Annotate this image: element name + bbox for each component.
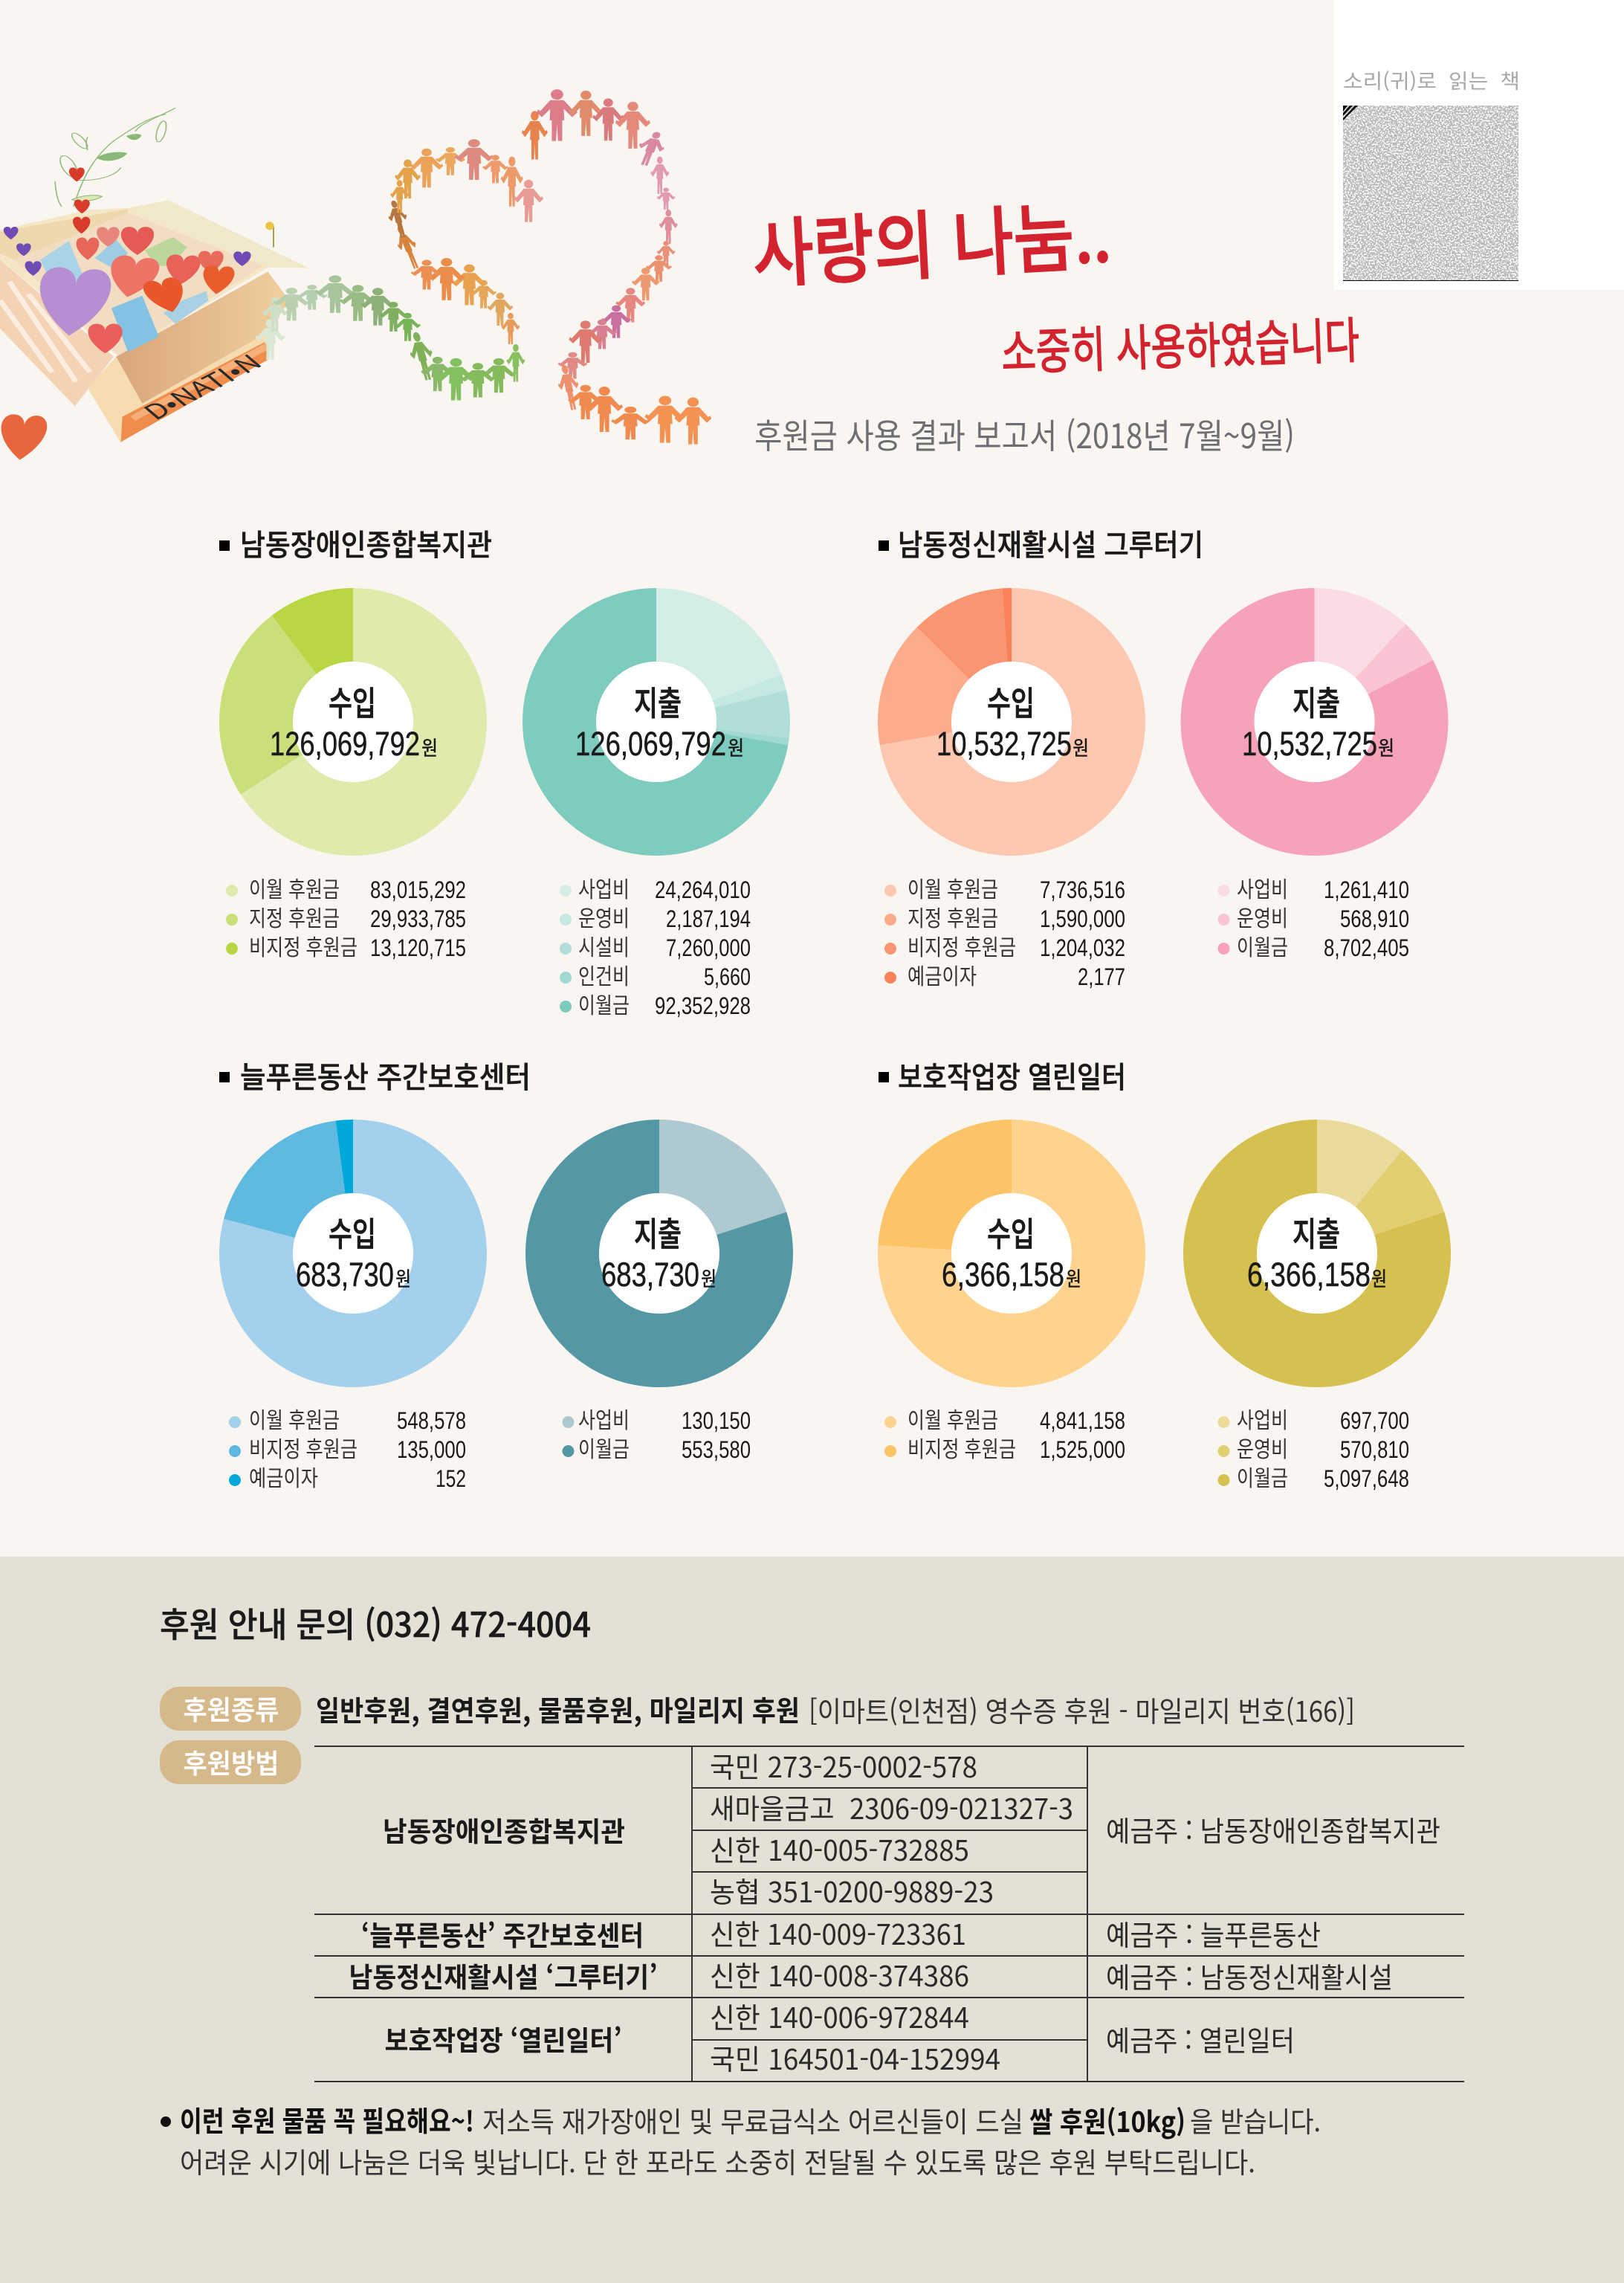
legend: income: 548,578 [397,1407,466,1434]
panel: 늘푸른동산 주간보호센터 [219,1053,757,1493]
legend: income: 1,590,000 [1040,905,1125,932]
center label: expense: 683,730 [601,1256,699,1294]
legend: income: 예금이자 [908,958,977,991]
heading: 남동정신재활시설 그루터기 [898,521,1203,564]
account holders: 예금주 : 열린일터 [1106,2018,1295,2059]
legend: income: 지정 후원금 [908,900,998,933]
report caption: 후원금 사용 결과 보고서 (2018년 7월~9월) [754,410,1295,459]
note: rice donation request [161,2099,1321,2181]
legend: expense: 사업비 [578,1402,630,1435]
audio code caption: 소리(귀)로 읽는 책 [1343,65,1520,94]
note: rice donation request: 쌀 후원(10kg) [1029,2099,1185,2140]
illustration: donation box with hearts and people chain (drawn in enlarged units) [0,89,711,461]
panel: 보호작업장 열린일터 [879,1053,1414,1493]
center label: expense: 지출 [634,1207,682,1256]
account numbers: 국민 273-25-0002-578 [710,1745,977,1786]
legend: expense: 운영비 [578,900,630,933]
center label: income: 수입 [329,676,376,725]
legend: income: 83,015,292 [370,876,466,903]
center label: income: 원 [421,732,438,761]
donut: expense [1217,624,1411,819]
legend: expense [562,1402,751,1464]
account numbers: 국민 164501-04-152994 [710,2037,1000,2078]
center label: income: 원 [395,1263,411,1292]
account numbers [710,1745,1073,2078]
legend: expense [1217,871,1409,962]
legend: expense: 운영비 [1237,900,1288,933]
center label: income: 수입 [987,1207,1035,1256]
donut: expense [1220,1157,1414,1350]
flower on box flap [265,222,274,248]
pill: donation methods: 후원방법 [183,1743,279,1781]
center label: income: 6,366,158 [942,1256,1064,1294]
legend: income: 비지정 후원금 [908,929,1016,962]
legend: income [229,1402,466,1493]
center label: income [270,676,438,763]
legend: income [226,871,466,962]
legend: expense: 이월금 [578,1431,630,1464]
center label: expense: 지출 [1293,1207,1340,1256]
center label: expense [1247,1207,1387,1294]
donut: income [914,624,1109,819]
legend: expense: 운영비 [1237,1431,1288,1464]
pill: donation types: 후원종류 [183,1689,279,1728]
legend: expense: 사업비 [1237,871,1288,904]
account numbers: 신한 140-005-732885 [710,1828,969,1869]
legend: income: 지정 후원금 [249,900,340,933]
legend: income: 2,177 [1078,963,1125,990]
legend: expense: 2,187,194 [666,905,751,932]
legend: expense: 시설비 [578,929,630,962]
center label: expense [575,676,744,763]
center label: expense [1242,676,1394,763]
center label: expense: 원 [728,732,744,761]
center label: expense [601,1207,716,1294]
center label: expense: 원 [1378,732,1394,761]
donut: income [256,1157,450,1350]
box label: D•NATI•N [134,346,270,426]
title: 사랑의 나눔.. [750,176,1113,303]
panel: 남동장애인종합복지관 [219,521,754,1020]
open cardboard box [0,200,308,443]
donut: expense [559,624,754,819]
audio code pattern [1343,106,1518,281]
legend: expense: 1,261,410 [1324,876,1409,903]
gift packages [40,237,209,352]
legend: expense: 5,660 [704,963,751,990]
center label: expense: 지출 [634,676,682,725]
donation types text: [이마트(인천점) 영수증 후원 - 마일리지 번호(166)] [809,1689,1355,1730]
account holders [1106,1809,1440,2059]
account numbers: 신한 140-009-723361 [710,1912,966,1953]
legend: income: 이월 후원금 [249,1402,340,1435]
legend: income [884,1402,1125,1464]
center label: income [296,1207,411,1294]
legend: expense: 553,580 [682,1436,751,1463]
legend: income: 152 [436,1465,466,1492]
center label: expense: 10,532,725 [1242,725,1377,763]
heading: 보호작업장 열린일터 [898,1053,1126,1097]
legend: income: 1,525,000 [1040,1436,1125,1463]
pill: donation types [160,1687,301,1731]
legend: expense: 130,150 [682,1407,751,1434]
center label: income: 10,532,725 [936,725,1072,763]
chain of people forming a heart [256,89,711,445]
center label: income [942,1207,1081,1294]
center label: expense: 원 [1371,1263,1387,1292]
panel: 남동정신재활시설 그루터기 [879,521,1411,991]
legend: expense: 24,264,010 [655,876,751,903]
vine growing from box [55,108,175,207]
legend: expense: 570,810 [1340,1436,1409,1463]
legend: income: 비지정 후원금 [249,1431,358,1464]
center label: expense: 6,366,158 [1247,1256,1371,1294]
center label: income: 수입 [987,676,1035,725]
legend: expense [1217,1402,1409,1493]
legend: expense: 인건비 [578,958,630,991]
subtitle: 소중히 사용하였습니다 [1000,301,1360,385]
note: rice donation request: 저소득 재가장애인 및 무료급식소 어르신들이 드실 [482,2099,1023,2140]
loose heart [0,413,48,461]
center label: income: 원 [1073,732,1089,761]
donut: expense [562,1157,757,1350]
pill: donation methods [160,1740,301,1784]
legend: income: 7,736,516 [1040,876,1125,903]
center label: income [936,676,1089,763]
heading: 늘푸른동산 주간보호센터 [240,1053,531,1097]
note: rice donation request: 이런 후원 물품 꼭 필요해요~! [180,2099,474,2140]
legend: expense [560,871,751,1020]
center label: income: 원 [1066,1263,1081,1292]
legend: expense: 이월금 [578,987,630,1020]
white box with audio code [1334,0,1624,290]
account holders: 예금주 : 늘푸른동산 [1106,1913,1321,1954]
organisation names: 남동정신재활시설 ‘그루터기’ [349,1955,657,1995]
organisation names: 보호작업장 ‘열린일터’ [385,2018,621,2058]
donut: income [256,624,450,819]
note: rice donation request: 을 받습니다. [1190,2099,1321,2140]
legend: income: 비지정 후원금 [249,929,358,962]
legend: expense: 697,700 [1340,1407,1409,1434]
page background [0,0,1624,1557]
donation types text [316,1688,1355,1730]
heading: 남동장애인종합복지관 [240,521,492,564]
account holders: 예금주 : 남동장애인종합복지관 [1106,1809,1440,1850]
center label: expense: 원 [701,1263,716,1292]
center label: expense: 126,069,792 [575,725,726,763]
note: rice donation request: 어려운 시기에 나눔은 더욱 빛납니다. 단 한 포라도 소중히 전달될 수 있도록 많은 후원 부탁드립니다. [180,2140,1255,2181]
center label: income: 683,730 [296,1256,394,1294]
organisation names: 남동장애인종합복지관 [383,1809,625,1850]
legend: income: 비지정 후원금 [908,1431,1016,1464]
legend: income: 135,000 [397,1436,466,1463]
legend: income: 4,841,158 [1040,1407,1125,1434]
legend: income: 이월 후원금 [908,871,998,904]
legend: income: 13,120,715 [370,934,466,961]
legend: expense: 이월금 [1237,1460,1288,1493]
legend: expense: 5,097,648 [1324,1465,1409,1492]
panel: donation information [0,1557,1624,2283]
account numbers: 신한 140-008-374386 [710,1954,969,1995]
legend: expense: 8,702,405 [1324,934,1409,961]
heading: contact: 후원 안내 문의 (032) 472-4004 [160,1598,591,1647]
legend: income: 1,204,032 [1040,934,1125,961]
account numbers: 새마을금고 2306-09-021327-3 [710,1786,1073,1827]
legend: expense: 568,910 [1340,905,1409,932]
legend: expense: 사업비 [1237,1402,1288,1435]
donation types text: 일반후원, 결연후원, 물품후원, 마일리지 후원 [316,1688,800,1729]
center label: expense: 지출 [1293,676,1340,725]
legend: income: 예금이자 [249,1460,318,1493]
account holders: 예금주 : 남동정신재활시설 [1106,1955,1393,1996]
hearts in box [4,167,251,353]
organisation names: ‘늘푸른동산’ 주간보호센터 [361,1914,644,1954]
legend: income: 이월 후원금 [249,871,340,904]
legend: income: 이월 후원금 [908,1402,998,1435]
center label: income: 126,069,792 [270,725,420,763]
donut: income [914,1157,1109,1350]
legend: expense: 사업비 [578,871,630,904]
legend: expense: 92,352,928 [655,992,751,1019]
account numbers: 농협 351-0200-9889-23 [710,1870,994,1911]
legend: income: 29,933,785 [370,905,466,932]
table: bank accounts [314,1745,1464,2082]
account numbers: 신한 140-006-972844 [710,1995,969,2036]
legend: expense: 7,260,000 [666,934,751,961]
legend: expense: 이월금 [1237,929,1288,962]
center label: income: 수입 [329,1207,376,1256]
organisation names [349,1809,657,2058]
legend: income [884,871,1125,991]
